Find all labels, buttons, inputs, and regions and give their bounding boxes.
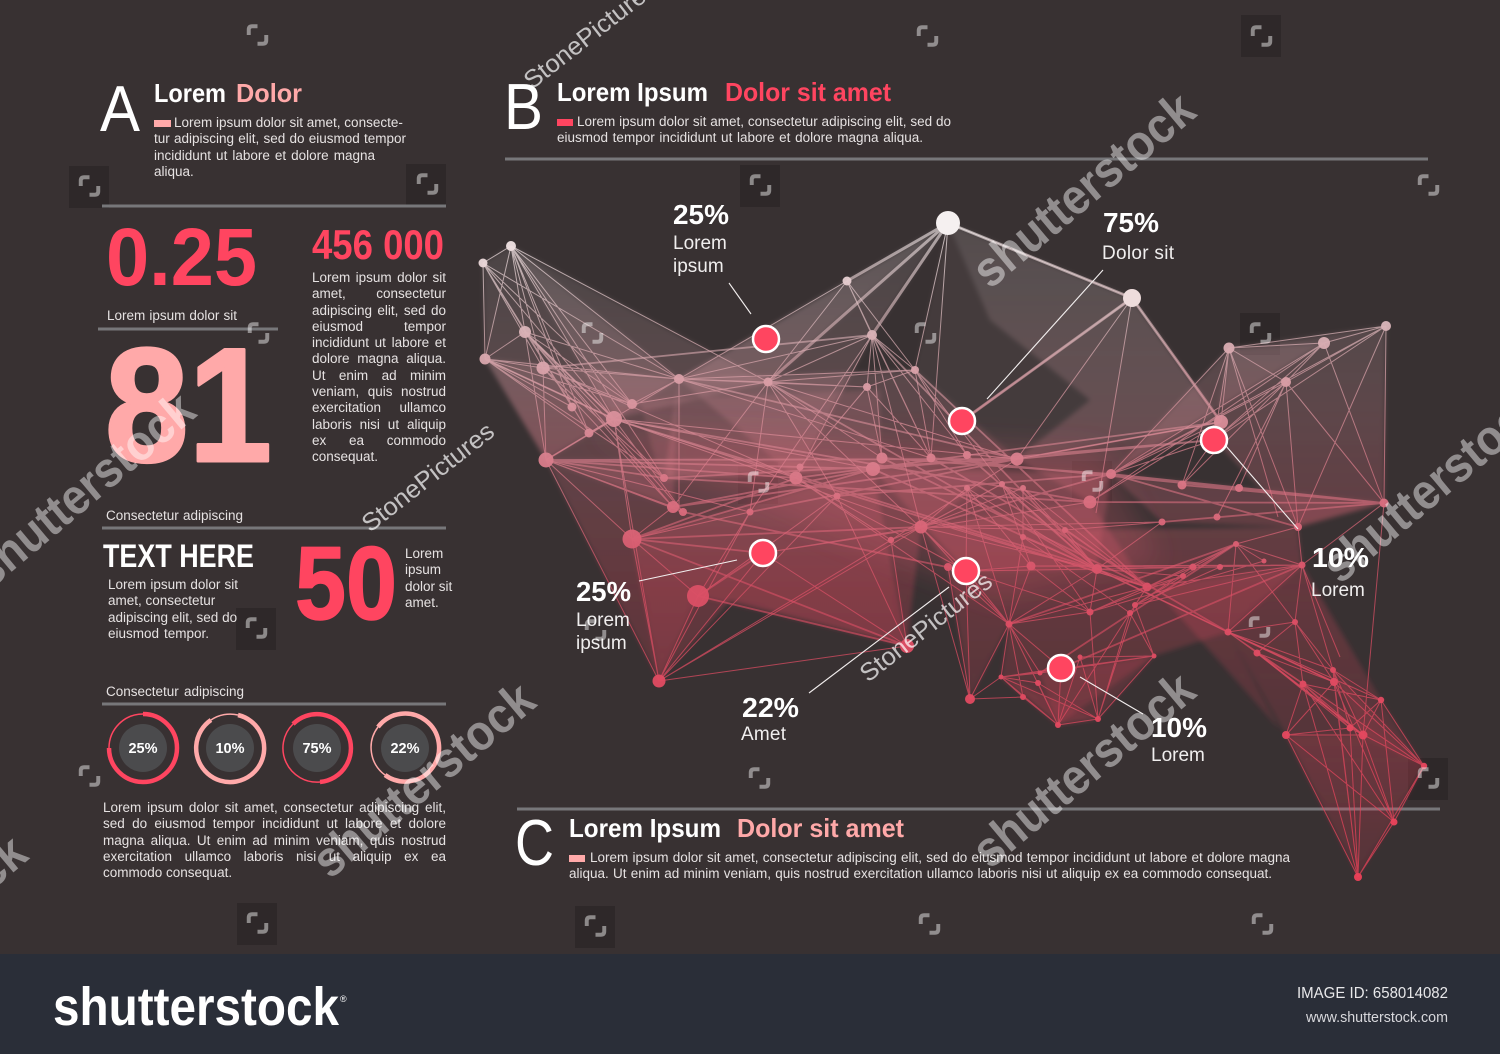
upper right node [1123,289,1141,307]
callout: 10% Lorem lower [1151,712,1207,766]
text block: 50 description: dolor sit [405,579,452,594]
TEXT HERE heading: TEXT HERE [103,538,254,574]
text block: section B intro [557,114,951,145]
watermark: shutterstock: shutterstock [301,671,546,888]
callout: 25% Lorem ipsum lower [576,576,631,654]
callout markers [750,326,1227,681]
text block: donut description: commodo consequat. [103,865,232,880]
text block: section A intro: Lorem ipsum dolor sit amet, consecte- [174,115,403,130]
donut: 25%: 25% [128,741,158,757]
caption: Lorem ipsum dolor sit: Lorem ipsum dolor sit [107,308,237,323]
text block: donut description: magna aliqua. Ut enim ad minim veniam, quis nostrud [103,833,446,848]
text block: 456 000 description: ex ea commodo [312,433,446,448]
shutterstock logo: ® [340,994,347,1004]
heading: Lorem Dolor: Lorem [154,78,226,108]
text block: 50 description: amet. [405,595,439,610]
donut: 75% [283,714,351,782]
watermark: StonePictures [356,0,998,688]
watermark: shutterstock: shutterstock [961,81,1206,298]
heading: Lorem Dolor [154,78,302,108]
text block: TEXT HERE body: amet, consectetur [108,593,215,608]
callout: 75% Dolor sit [1102,207,1175,264]
section letter A: A [100,72,141,145]
callout: 22% Amet [741,692,799,745]
callout: 25% Lorem ipsum lower: Lorem [576,610,630,631]
callout: 25% Lorem ipsum lower: 25% [576,576,631,607]
text block: 456 000 description: consequat. [312,449,378,464]
section rules [98,159,1440,809]
watermark: StonePictures: StonePictures [854,567,998,688]
text block: 50 description [405,546,452,610]
big number 456 000: 456 000 [312,221,444,268]
big number 81: 81 [105,315,272,496]
text block: donut description [103,800,446,880]
text block: 456 000 description: Ut enim ad minim [312,368,446,383]
text block: 456 000 description: veniam, quis nostrud [312,384,446,399]
callout: 75% Dolor sit: 75% [1103,207,1159,238]
text block: 456 000 description [312,270,446,464]
callout: 25% Lorem ipsum: Lorem [673,233,727,254]
text block: 456 000 description: incididunt ut labore et [312,335,446,350]
heading: section C [569,813,904,843]
image id: IMAGE ID: 658014082 [1297,985,1448,1002]
text block: section C intro: Lorem ipsum dolor sit amet, consectetur adipiscing elit, sed do eiusmod tempor incididunt ut labore et dolore magna [590,850,1290,865]
text block: section C intro [569,850,1290,881]
text block: TEXT HERE body: adipiscing elit, sed do [108,610,237,625]
network shaded facets [483,223,1424,877]
chart: polygon network [478,211,1427,881]
big number 50: 50 [295,526,397,642]
network glow band [590,430,1160,600]
heading: section C: Dolor sit amet [737,813,904,843]
text block: section B intro: eiusmod tempor incididunt ut labore et dolore magna aliqua. [557,130,923,145]
text block: 456 000 description: dolore magna aliqua. [312,351,446,366]
callout: 10% Lorem right [1311,542,1369,601]
heading: Lorem Ipsum Dolor sit amet [557,77,891,107]
shutterstock logo: shutterstock [53,977,340,1037]
callout: 22% Amet: Amet [741,724,787,745]
callout: 10% Lorem lower: 10% [1151,712,1207,743]
big number 0.25: 0.25 [106,212,257,303]
callout: 25% Lorem ipsum: ipsum [673,256,724,277]
text block: 456 000 description: Lorem ipsum dolor sit [312,270,446,285]
heading: Lorem Ipsum Dolor sit amet: Lorem Ipsum [557,77,708,107]
section letter B: B [504,70,543,143]
caption: Consectetur adipiscing 2: Consectetur adipiscing [106,684,244,699]
donut: 25% [109,714,177,782]
watermark: StonePictures: StonePictures [356,417,500,538]
callout: 25% Lorem ipsum: 25% [673,199,729,230]
heading: Lorem Ipsum Dolor sit amet: Dolor sit amet [725,77,891,107]
text block: section B intro: Lorem ipsum dolor sit amet, consectetur adipiscing elit, sed do [577,114,951,129]
text block: 456 000 description: exercitation ullamco [312,400,446,415]
callout: 75% Dolor sit: Dolor sit [1102,243,1175,264]
donut: 10% [196,714,264,782]
website: www.shutterstock.com [1305,1010,1448,1026]
text block: section A intro: tur adipiscing elit, sed do eiusmod tempor [154,131,406,146]
callout: 22% Amet: 22% [742,692,799,723]
text block: 456 000 description: laboris nisi ut aliquip [312,417,446,432]
callout: 25% Lorem ipsum lower: ipsum [576,633,627,654]
text block: 456 000 description: eiusmod tempor [312,319,446,334]
text block: TEXT HERE body [108,577,238,641]
text block: section A intro: incididunt ut labore et dolore magna [154,148,375,163]
section letter C: C [515,806,554,879]
network medium links [485,298,1384,735]
text block: 456 000 description: adipiscing elit, sed do [312,303,446,318]
text block: TEXT HERE body: eiusmod tempor. [108,626,209,641]
text block: donut description: exercitation ullamco laboris nisi ut aliquip ex ea [103,849,446,864]
text block: donut description: sed do eiusmod tempor incididunt ut labore et dolore [103,816,446,831]
text block: 50 description: Lorem [405,546,443,561]
donut: 75%: 75% [302,741,332,757]
text block: 50 description: ipsum [405,562,441,577]
donut: 22%: 22% [390,741,420,757]
top node [936,211,960,235]
donut: 22% [371,714,439,782]
network thin links [483,223,1424,877]
network thick links [768,223,1221,422]
heading: section C: Lorem Ipsum [569,813,721,843]
donut: 10%: 10% [215,741,245,757]
text block: donut description: Lorem ipsum dolor sit amet, consectetur adipiscing elit, [103,800,446,815]
callout: 25% Lorem ipsum [673,199,729,277]
text block: section A intro [154,115,406,179]
legend swatches [154,119,585,862]
footer band [0,954,1500,1054]
text block: section A intro: aliqua. [154,164,194,179]
icon: watermark brackets [81,26,1437,935]
callout leader lines [639,270,1298,714]
network nodes [478,241,1427,881]
text block: TEXT HERE body: Lorem ipsum dolor sit [108,577,238,592]
callout: 10% Lorem lower: Lorem [1151,745,1205,766]
heading: Lorem Dolor: Dolor [236,78,302,108]
text block: section C intro: aliqua. Ut enim ad minim veniam, quis nostrud exercitation ullamco laboris nisi ut aliquip ex ea commodo consequat. [569,866,1272,881]
caption: Consectetur adipiscing 1: Consectetur adipiscing [106,508,243,523]
watermark: shutterstock: shutterstock [961,661,1206,878]
callout: 10% Lorem right: Lorem [1311,580,1365,601]
callout: 10% Lorem right: 10% [1312,542,1369,573]
text block: 456 000 description: amet, consectetur [312,286,446,301]
